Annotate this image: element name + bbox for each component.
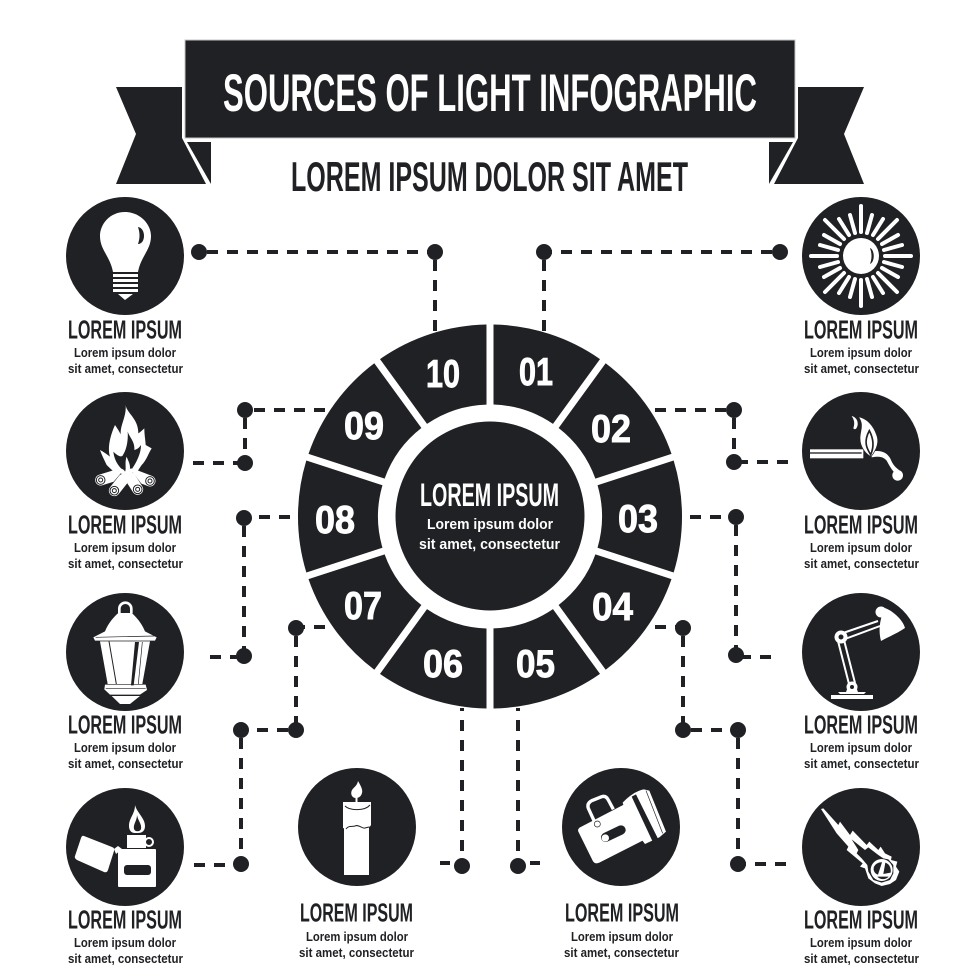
ribbon right tail	[774, 87, 864, 184]
text block: sit amet, consectetur	[564, 945, 679, 960]
title ribbon	[116, 40, 864, 184]
panel: street lantern	[66, 593, 184, 771]
text block: sit amet, consectetur	[804, 361, 919, 376]
text block: Lorem ipsum dolor	[810, 740, 912, 755]
connector: item 01 to sun	[536, 244, 788, 332]
panel: lighter	[66, 788, 184, 966]
ribbon right fold	[769, 142, 793, 184]
icon: lighter	[66, 788, 184, 906]
ribbon left fold	[187, 142, 211, 184]
center text: Lorem ipsum dolor	[427, 517, 553, 533]
wheel segments	[273, 297, 707, 736]
center text: sit amet, consectetur	[419, 537, 560, 553]
text block: sit amet, consectetur	[68, 556, 183, 571]
segment numbers: 07	[344, 585, 382, 628]
connector: item 05 to flashlight	[510, 708, 540, 874]
segment numbers: 08	[315, 499, 355, 542]
text block: Lorem ipsum dolor	[571, 929, 673, 944]
panel: sun	[802, 197, 920, 376]
ribbon main band	[185, 40, 795, 138]
text block: sit amet, consectetur	[299, 945, 414, 960]
icon: sun	[802, 197, 920, 315]
connector: item 04 to comet	[655, 620, 786, 872]
connector: item 06 to candle	[440, 708, 470, 874]
text block: Lorem ipsum dolor	[74, 935, 176, 950]
text block	[68, 345, 183, 376]
text block	[299, 929, 414, 960]
text block: Lorem ipsum dolor	[306, 929, 408, 944]
connector: item 10 to bulb	[191, 244, 443, 332]
text block: Lorem ipsum dolor	[74, 345, 176, 360]
connector: item 02 to match	[655, 402, 788, 470]
heading: LOREM IPSUM	[565, 898, 679, 928]
panel: flashlight	[562, 768, 680, 960]
text block: sit amet, consectetur	[804, 756, 919, 771]
connector: item 09 to campfire	[193, 402, 325, 471]
panel: candle	[298, 768, 416, 960]
panel: desk lamp	[802, 593, 920, 771]
text block: sit amet, consectetur	[68, 756, 183, 771]
icon: comet	[802, 788, 920, 906]
connector: item 07 to lighter	[194, 620, 325, 872]
segment numbers: 01	[519, 351, 553, 394]
icon: street lantern	[66, 593, 184, 711]
panel: match	[802, 392, 920, 571]
text block: sit amet, consectetur	[804, 556, 919, 571]
text block: Lorem ipsum dolor	[810, 935, 912, 950]
text block	[68, 740, 183, 771]
text block	[804, 540, 919, 571]
text block: Lorem ipsum dolor	[810, 540, 912, 555]
text block: sit amet, consectetur	[68, 951, 183, 966]
segment numbers: 09	[344, 405, 384, 448]
icon: burning match	[802, 392, 920, 510]
heading: LOREM IPSUM	[68, 904, 182, 934]
heading: LOREM IPSUM	[68, 314, 182, 344]
segment numbers: 03	[618, 498, 658, 541]
text block: Lorem ipsum dolor	[810, 345, 912, 360]
text block	[68, 540, 183, 571]
segment numbers: 06	[423, 643, 463, 686]
heading: LOREM IPSUM	[300, 898, 413, 928]
icon: desk lamp	[802, 593, 920, 711]
text block	[68, 935, 183, 966]
connector: item 08 to lantern	[210, 510, 290, 664]
text block: sit amet, consectetur	[804, 951, 919, 966]
text block: Lorem ipsum dolor	[74, 540, 176, 555]
center wheel	[273, 297, 707, 736]
icon: flashlight	[562, 768, 680, 886]
text block: Lorem ipsum dolor	[74, 740, 176, 755]
text block	[804, 935, 919, 966]
text block	[564, 929, 679, 960]
text block	[804, 345, 919, 376]
center disc	[396, 422, 584, 610]
panel: light bulb	[66, 197, 184, 376]
panel: comet	[802, 788, 920, 966]
heading: LOREM IPSUM	[68, 710, 182, 740]
subtitle: LOREM IPSUM DOLOR SIT AMET	[291, 153, 688, 200]
center heading: LOREM IPSUM	[420, 477, 559, 513]
segment numbers	[315, 351, 658, 686]
segment numbers: 10	[426, 353, 460, 396]
panel: campfire	[66, 392, 184, 571]
center text	[419, 517, 560, 553]
icon: candle	[298, 768, 416, 886]
segment numbers: 04	[592, 586, 633, 629]
heading: LOREM IPSUM	[68, 510, 182, 540]
segment numbers: 05	[516, 643, 555, 686]
connector: item 03 to desk lamp	[690, 509, 771, 663]
text block: sit amet, consectetur	[68, 361, 183, 376]
icon: light bulb	[66, 197, 184, 315]
icon: campfire	[66, 392, 184, 510]
ribbon left tail	[116, 87, 206, 184]
segment numbers: 02	[591, 408, 631, 451]
text block	[804, 740, 919, 771]
